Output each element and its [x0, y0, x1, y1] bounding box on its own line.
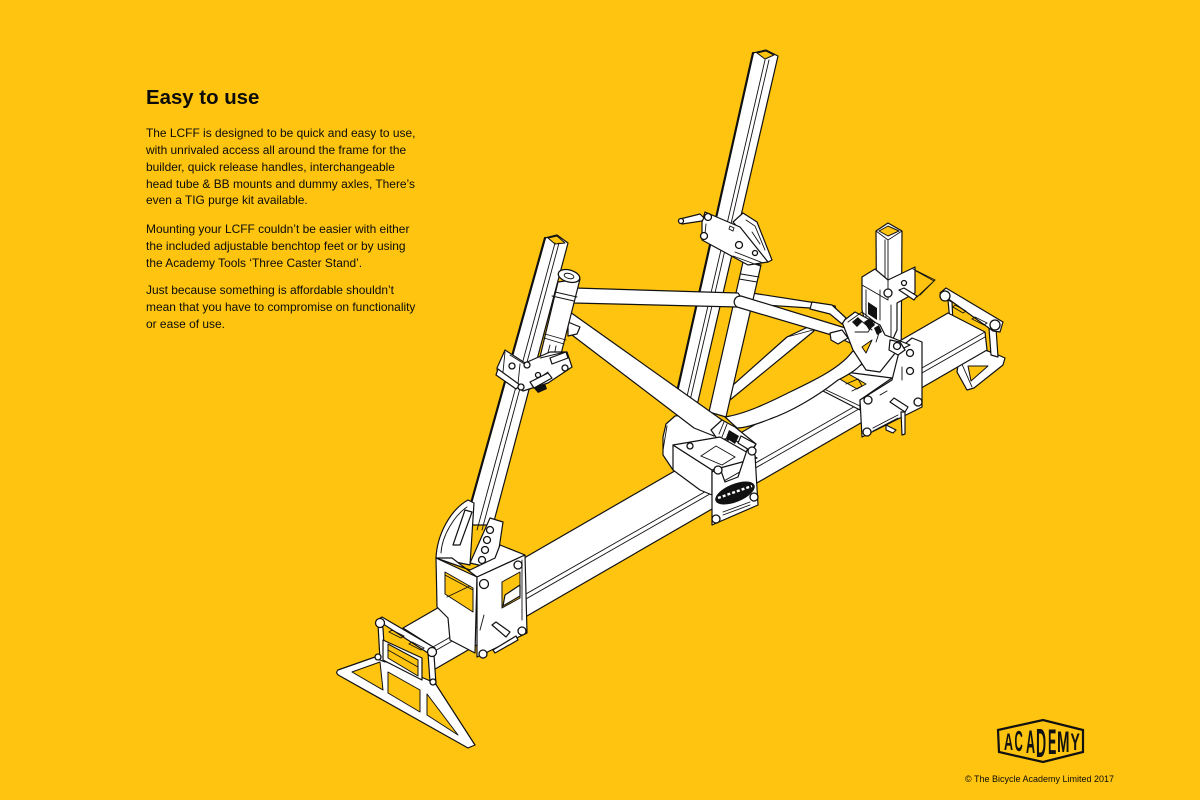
down tube — [568, 312, 722, 436]
top tube — [573, 288, 741, 307]
academy logo: C — [1014, 725, 1023, 758]
text block: intro: The LCFF is designed to be quick and easy to use, — [146, 126, 415, 140]
title: Easy to use — [146, 87, 259, 109]
seat stay — [734, 296, 860, 343]
left post clamp — [496, 350, 572, 393]
bottom bracket and axle — [711, 420, 756, 452]
front foot — [337, 617, 475, 748]
academy logo: A — [1004, 730, 1013, 756]
text block: intro: with unrivaled access all around the frame for the — [146, 143, 406, 157]
left post — [465, 235, 568, 530]
rear chainstay tube — [725, 346, 866, 428]
front clamp: box plates — [436, 545, 527, 658]
text block: affordability: mean that you have to compromise on functionality — [146, 300, 415, 314]
text block: mounting: Mounting your LCFF couldn’t be easier with either — [146, 222, 409, 236]
centre clamp: front plates — [673, 437, 758, 525]
centre post clamp — [678, 212, 772, 266]
centre clamp: rear casing — [663, 414, 728, 470]
text block: affordability — [146, 283, 416, 331]
text block: intro: even a TIG purge kit available. — [146, 193, 308, 207]
text block: intro — [146, 126, 415, 207]
academy logo: M — [1057, 726, 1069, 758]
text block: intro: head tube & BB mounts and dummy axles, There’s — [146, 177, 415, 191]
text block: intro: builder, quick release handles, interchangeable — [146, 160, 395, 174]
rear clamp: upper bracket — [862, 267, 935, 350]
academy logo: E — [1048, 722, 1056, 762]
rear clamp: back plates — [820, 362, 892, 410]
front clamp: quadrant and link plate — [436, 500, 503, 567]
text block: mounting: the included adjustable benchtop feet or by using — [146, 239, 406, 253]
text block: affordability: or ease of use. — [146, 317, 225, 331]
seat tube — [709, 262, 761, 417]
academy logo: A — [1026, 725, 1035, 761]
text block: mounting — [146, 222, 410, 270]
academy logo — [996, 718, 1084, 765]
far foot — [940, 288, 1005, 390]
academy logo: Y — [1070, 729, 1080, 756]
text block: affordability: Just because something is affordable shouldn’t — [146, 283, 394, 297]
rear dropout and dummy axle — [810, 302, 910, 372]
top tube extension — [750, 293, 838, 316]
lower seat strut tube — [730, 326, 814, 400]
head tube — [540, 267, 581, 362]
copyright: © The Bicycle Academy Limited 2017 — [965, 774, 1114, 784]
upright post: short rear — [876, 223, 902, 370]
rear clamp: front plate — [860, 338, 922, 437]
main beam — [403, 313, 987, 672]
upright post: tall centre — [673, 50, 778, 410]
text block: mounting: the Academy Tools ‘Three Caster Stand’. — [146, 256, 362, 270]
